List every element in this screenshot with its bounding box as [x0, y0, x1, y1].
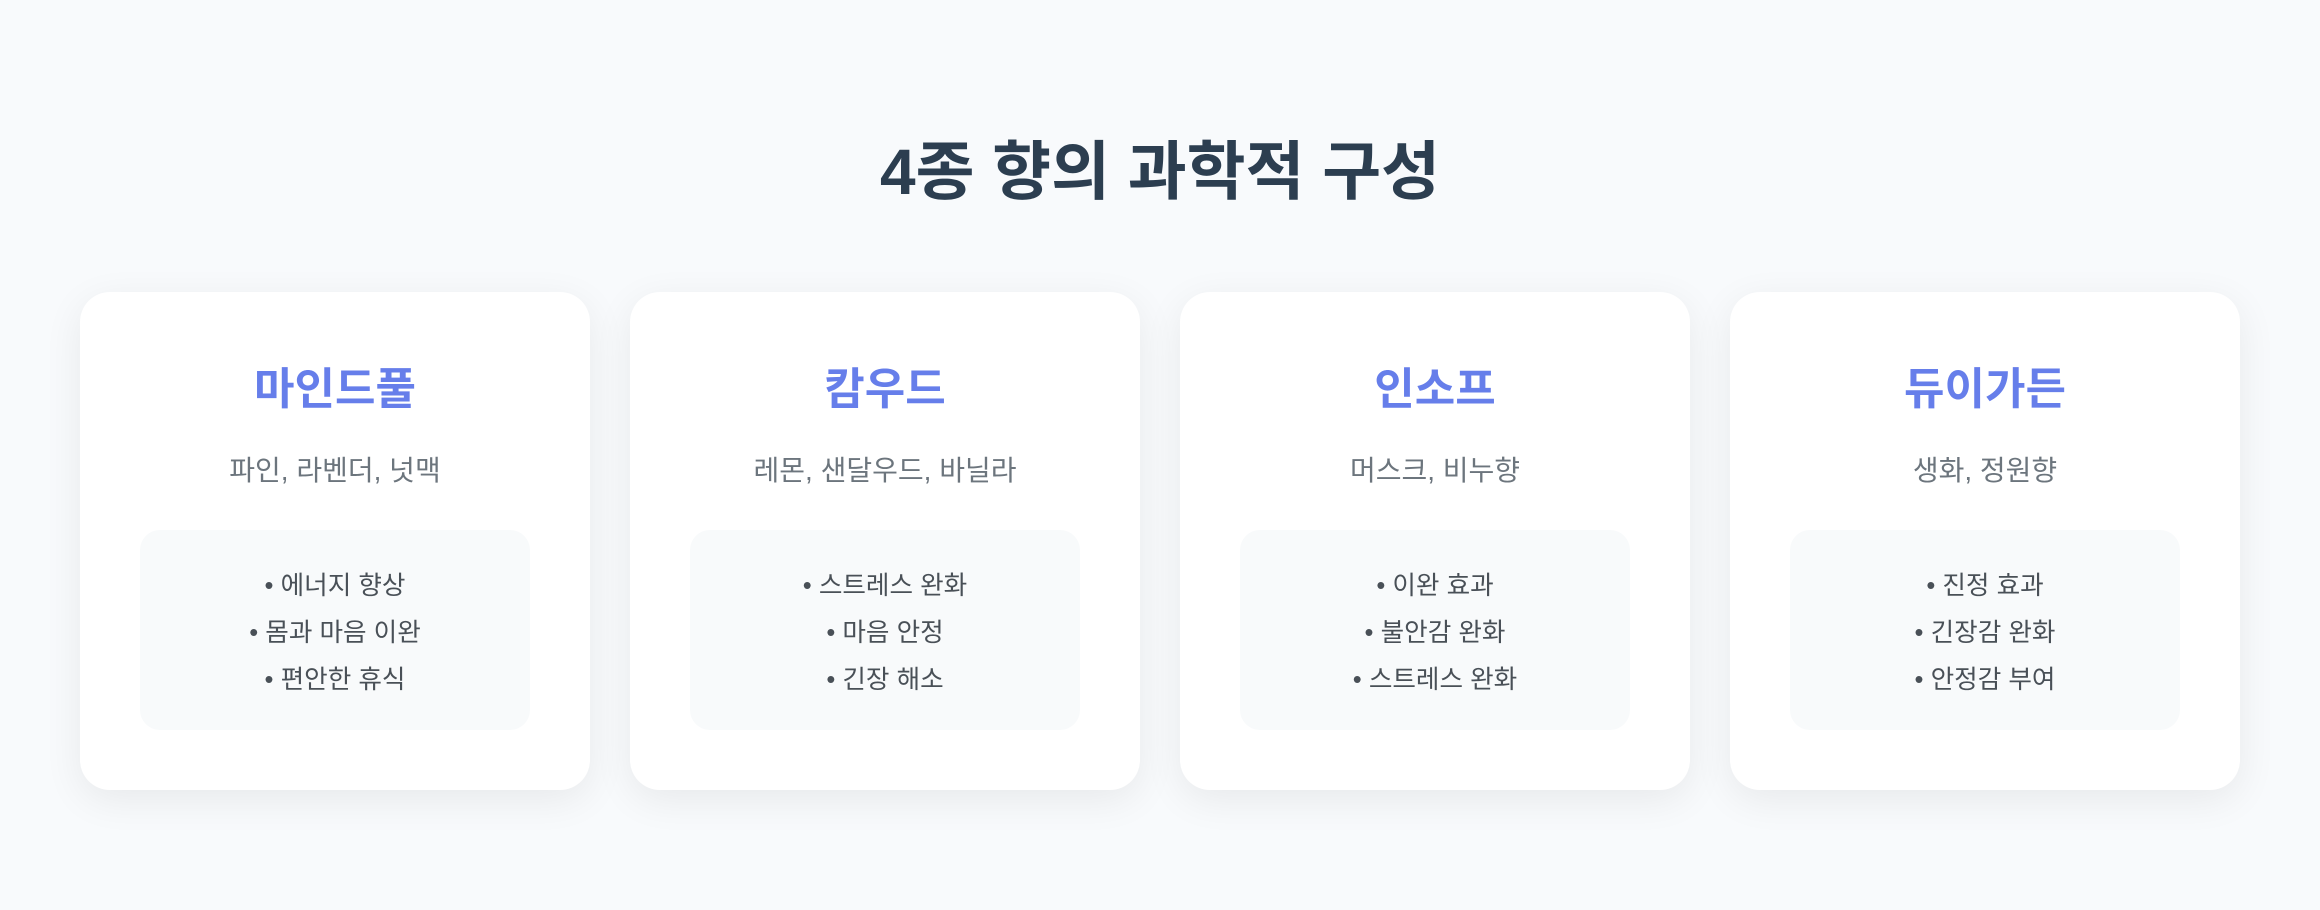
text: notes: 레몬, 샌달우드, 바닐라 [754, 455, 1016, 486]
heading: 인소프: 인소프 [1374, 365, 1496, 414]
list: benefits: • 이완 효과 [1376, 572, 1494, 600]
list: benefits [690, 530, 1080, 730]
panel: 인소프 [1180, 292, 1690, 790]
list: benefits [1240, 530, 1630, 730]
list: benefits: • 긴장감 완화 [1915, 619, 2055, 647]
list: benefits: • 진정 효과 [1926, 572, 2044, 600]
list: benefits: • 에너지 향상 [265, 572, 405, 600]
list: benefits [140, 530, 530, 730]
list: benefits [1790, 530, 2180, 730]
text: notes: 파인, 라벤더, 넛맥 [229, 455, 441, 486]
heading: 마인드풀: 마인드풀 [254, 365, 416, 414]
list: benefits: • 마음 안정 [826, 619, 944, 647]
list: benefits: • 스트레스 완화 [803, 572, 967, 600]
list: benefits: • 편안한 휴식 [265, 666, 405, 694]
list: benefits: • 스트레스 완화 [1353, 666, 1517, 694]
heading: 캄우드: 캄우드 [824, 365, 946, 414]
heading: 듀이가든: 듀이가든 [1904, 365, 2066, 414]
panel: 캄우드 [630, 292, 1140, 790]
list: benefits: • 안정감 부여 [1915, 666, 2055, 694]
title: 4종 향의 과학적 구성 [880, 136, 1440, 208]
panel: 마인드풀 [80, 292, 590, 790]
list: benefits: • 긴장 해소 [826, 666, 944, 694]
list: benefits: • 불안감 완화 [1365, 619, 1505, 647]
text: notes: 생화, 정원향 [1913, 455, 2057, 486]
list: benefits: • 몸과 마음 이완 [249, 619, 421, 647]
panel: 듀이가든 [1730, 292, 2240, 790]
text: notes: 머스크, 비누향 [1350, 455, 1520, 486]
